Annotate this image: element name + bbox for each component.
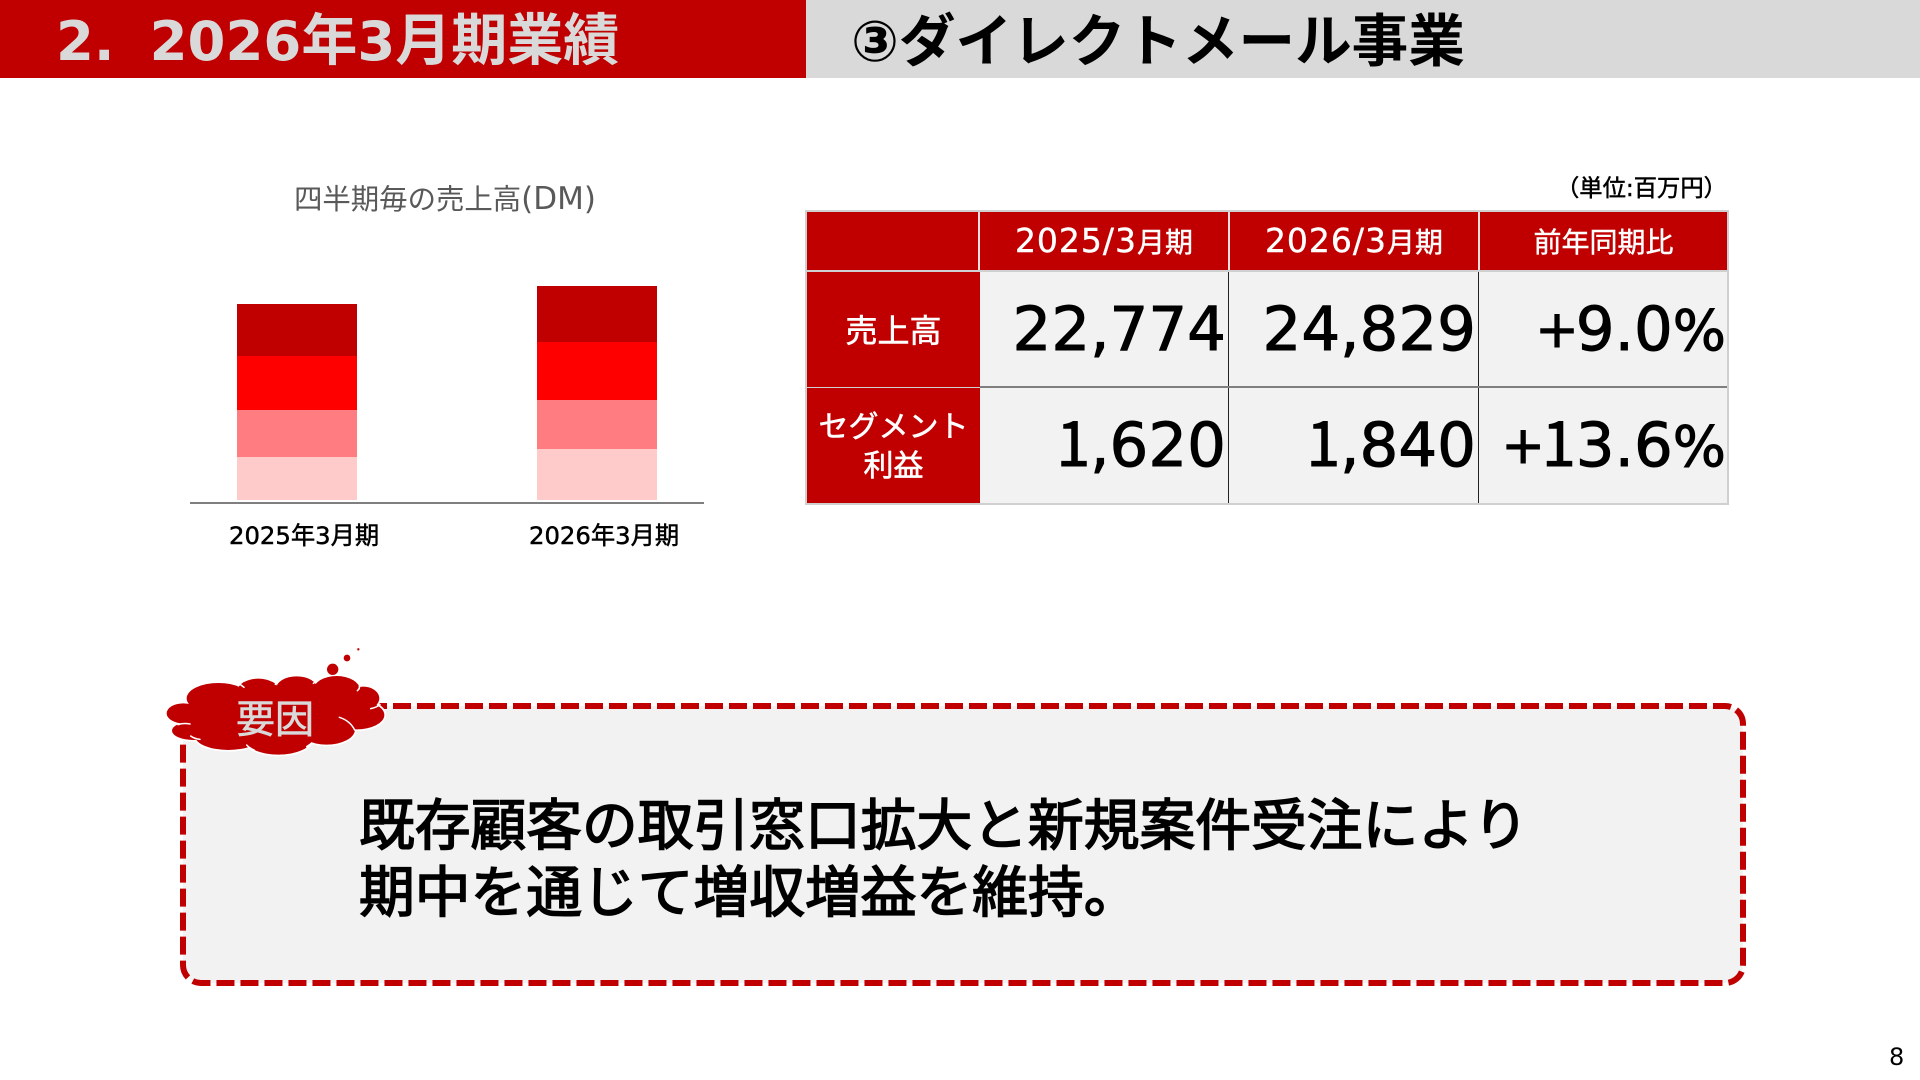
value: +9.0% <box>1480 272 1727 387</box>
row: セグメント利益 <box>807 388 1727 503</box>
header: 前年同期比 <box>1480 212 1727 270</box>
value: 24,829: 24,829 <box>1263 294 1476 365</box>
value: 1,840: 1,840 <box>1306 395 1476 484</box>
icon: cloud badge <box>166 648 386 756</box>
section heading: 2. 2026年3月期業績 <box>56 9 619 74</box>
cloud label: 要因 <box>236 698 314 743</box>
row label: セグメント利益 <box>807 388 980 503</box>
value: +13.6%: +13.6% <box>1501 395 1726 484</box>
header: 前年同期比: 前年同期比 <box>1533 226 1674 259</box>
value: 22,774: 22,774 <box>1013 294 1226 365</box>
callout body text: 既存顧客の取引窓口拡大と新規案件受注により <box>359 794 1529 859</box>
axis label 2025: 2025年3月期 <box>229 521 379 550</box>
value: +9.0%: +9.0% <box>1535 294 1726 365</box>
value: 1,620 <box>980 388 1229 503</box>
chart title: 四半期毎の売上高(DM) <box>294 181 596 217</box>
row label: セグメント利益: 利益 <box>864 448 924 484</box>
row: 売上高 <box>807 272 1727 387</box>
header bar: subsection title <box>806 0 1920 78</box>
header: 2026/3月期 <box>1230 212 1478 270</box>
bar: 2026年3月期 <box>537 286 657 500</box>
callout body text <box>359 794 1529 926</box>
subsection heading: ③ダイレクトメール事業 <box>851 9 1465 75</box>
bar: 2025年3月期 <box>237 304 357 500</box>
axis label 2026: 2026年3月期 <box>529 521 679 550</box>
row label: 売上高 <box>807 272 980 387</box>
header: 2025/3月期: 2025/3月期 <box>1015 221 1193 260</box>
unit note: （単位:百万円） <box>1556 175 1727 202</box>
value: 22,774 <box>980 272 1229 387</box>
page number: 8 <box>1889 1043 1904 1071</box>
callout body text: 期中を通じて増収増益を維持。 <box>359 860 1140 926</box>
value: 24,829 <box>1230 272 1479 387</box>
stacked bar chart: quarterly sales <box>190 286 704 504</box>
header bar: section title <box>0 0 806 78</box>
header: 2026/3月期: 2026/3月期 <box>1265 221 1443 260</box>
header: 2025/3月期 <box>980 212 1228 270</box>
table header row <box>807 212 1727 270</box>
row divider <box>980 386 1727 388</box>
value: 1,840 <box>1230 388 1479 503</box>
value: 1,620: 1,620 <box>1056 395 1226 484</box>
row label: 売上高: 売上高 <box>845 312 942 350</box>
callout panel: factors <box>180 703 1746 986</box>
results table <box>805 210 1729 505</box>
row label: セグメント利益: セグメント <box>818 410 968 444</box>
